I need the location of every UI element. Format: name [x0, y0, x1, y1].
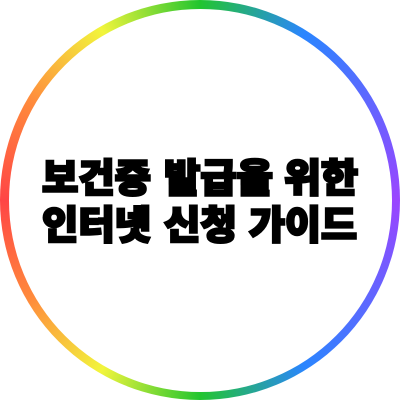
title: 발급을 — [164, 158, 273, 201]
title: 신청 — [164, 205, 237, 248]
title: 가이드 — [249, 205, 357, 248]
title: 인터넷 — [42, 205, 151, 248]
title: 위한 — [284, 158, 358, 201]
title: 보건증 — [42, 158, 151, 201]
